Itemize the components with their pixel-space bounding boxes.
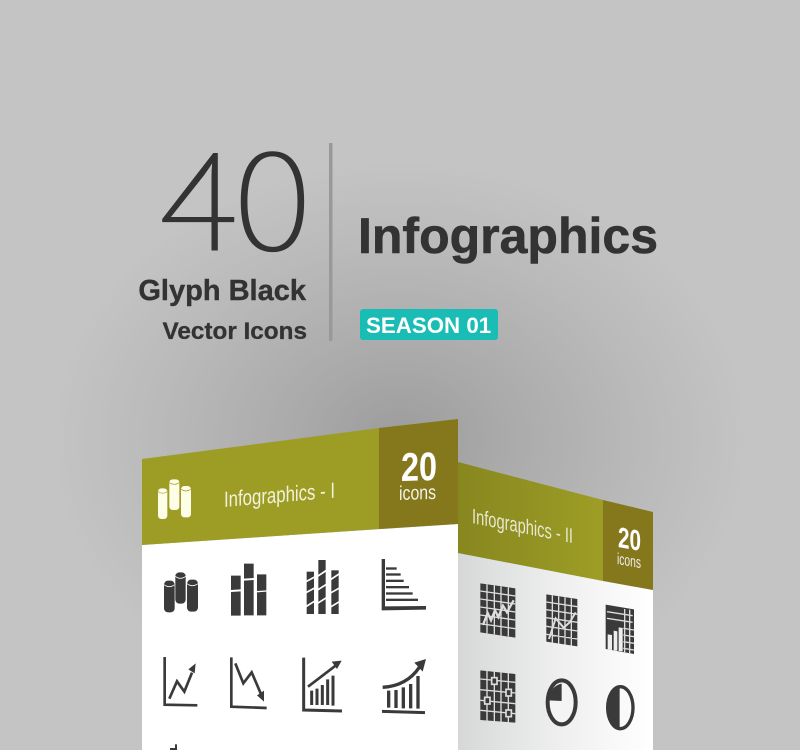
panel: Infographics I [142,419,458,750]
count block I [379,419,458,529]
icon: grid with bars [606,605,634,654]
heading: 40: 4 [160,97,239,289]
heading: 40: 0 [233,97,312,289]
icon: bars with curved arrow [382,659,426,713]
header text II: Infographics - II [472,505,573,548]
subheading: Glyph Black: Glyph Black [138,275,307,307]
icon: grid line chart dense [480,583,515,638]
count number I: 20 [401,445,437,490]
count block II [603,500,653,590]
title: Infographics: Infographics [358,208,658,264]
icon: falling line chart [231,657,267,708]
icon: hatched bars [305,560,340,614]
divider [329,143,332,341]
icon: grid line chart [546,594,577,646]
icon: partially visible chart [170,744,177,750]
header text I: Infographics - I [224,478,335,512]
icon: stacked bars [231,564,266,616]
header band II [458,462,603,581]
icon: cylinders [164,572,198,612]
panel: Infographics II [458,462,653,750]
icon: horizontal bar chart [382,559,426,610]
icon: bars with arrow [304,658,342,711]
subheading: Vector Icons: Vector Icons [162,318,307,345]
count number II: 20 [618,522,641,558]
icon: pie quarter [548,680,576,724]
icon: header cylinders [158,479,191,519]
count label II: icons [617,550,641,572]
header band I [142,428,379,545]
icon: rising line chart [165,657,197,705]
icon: grid with nodes [480,670,515,723]
icon: pie half [606,686,633,730]
badge: Season 01: SEASON 01 [366,313,491,338]
count label I: icons [399,482,436,505]
